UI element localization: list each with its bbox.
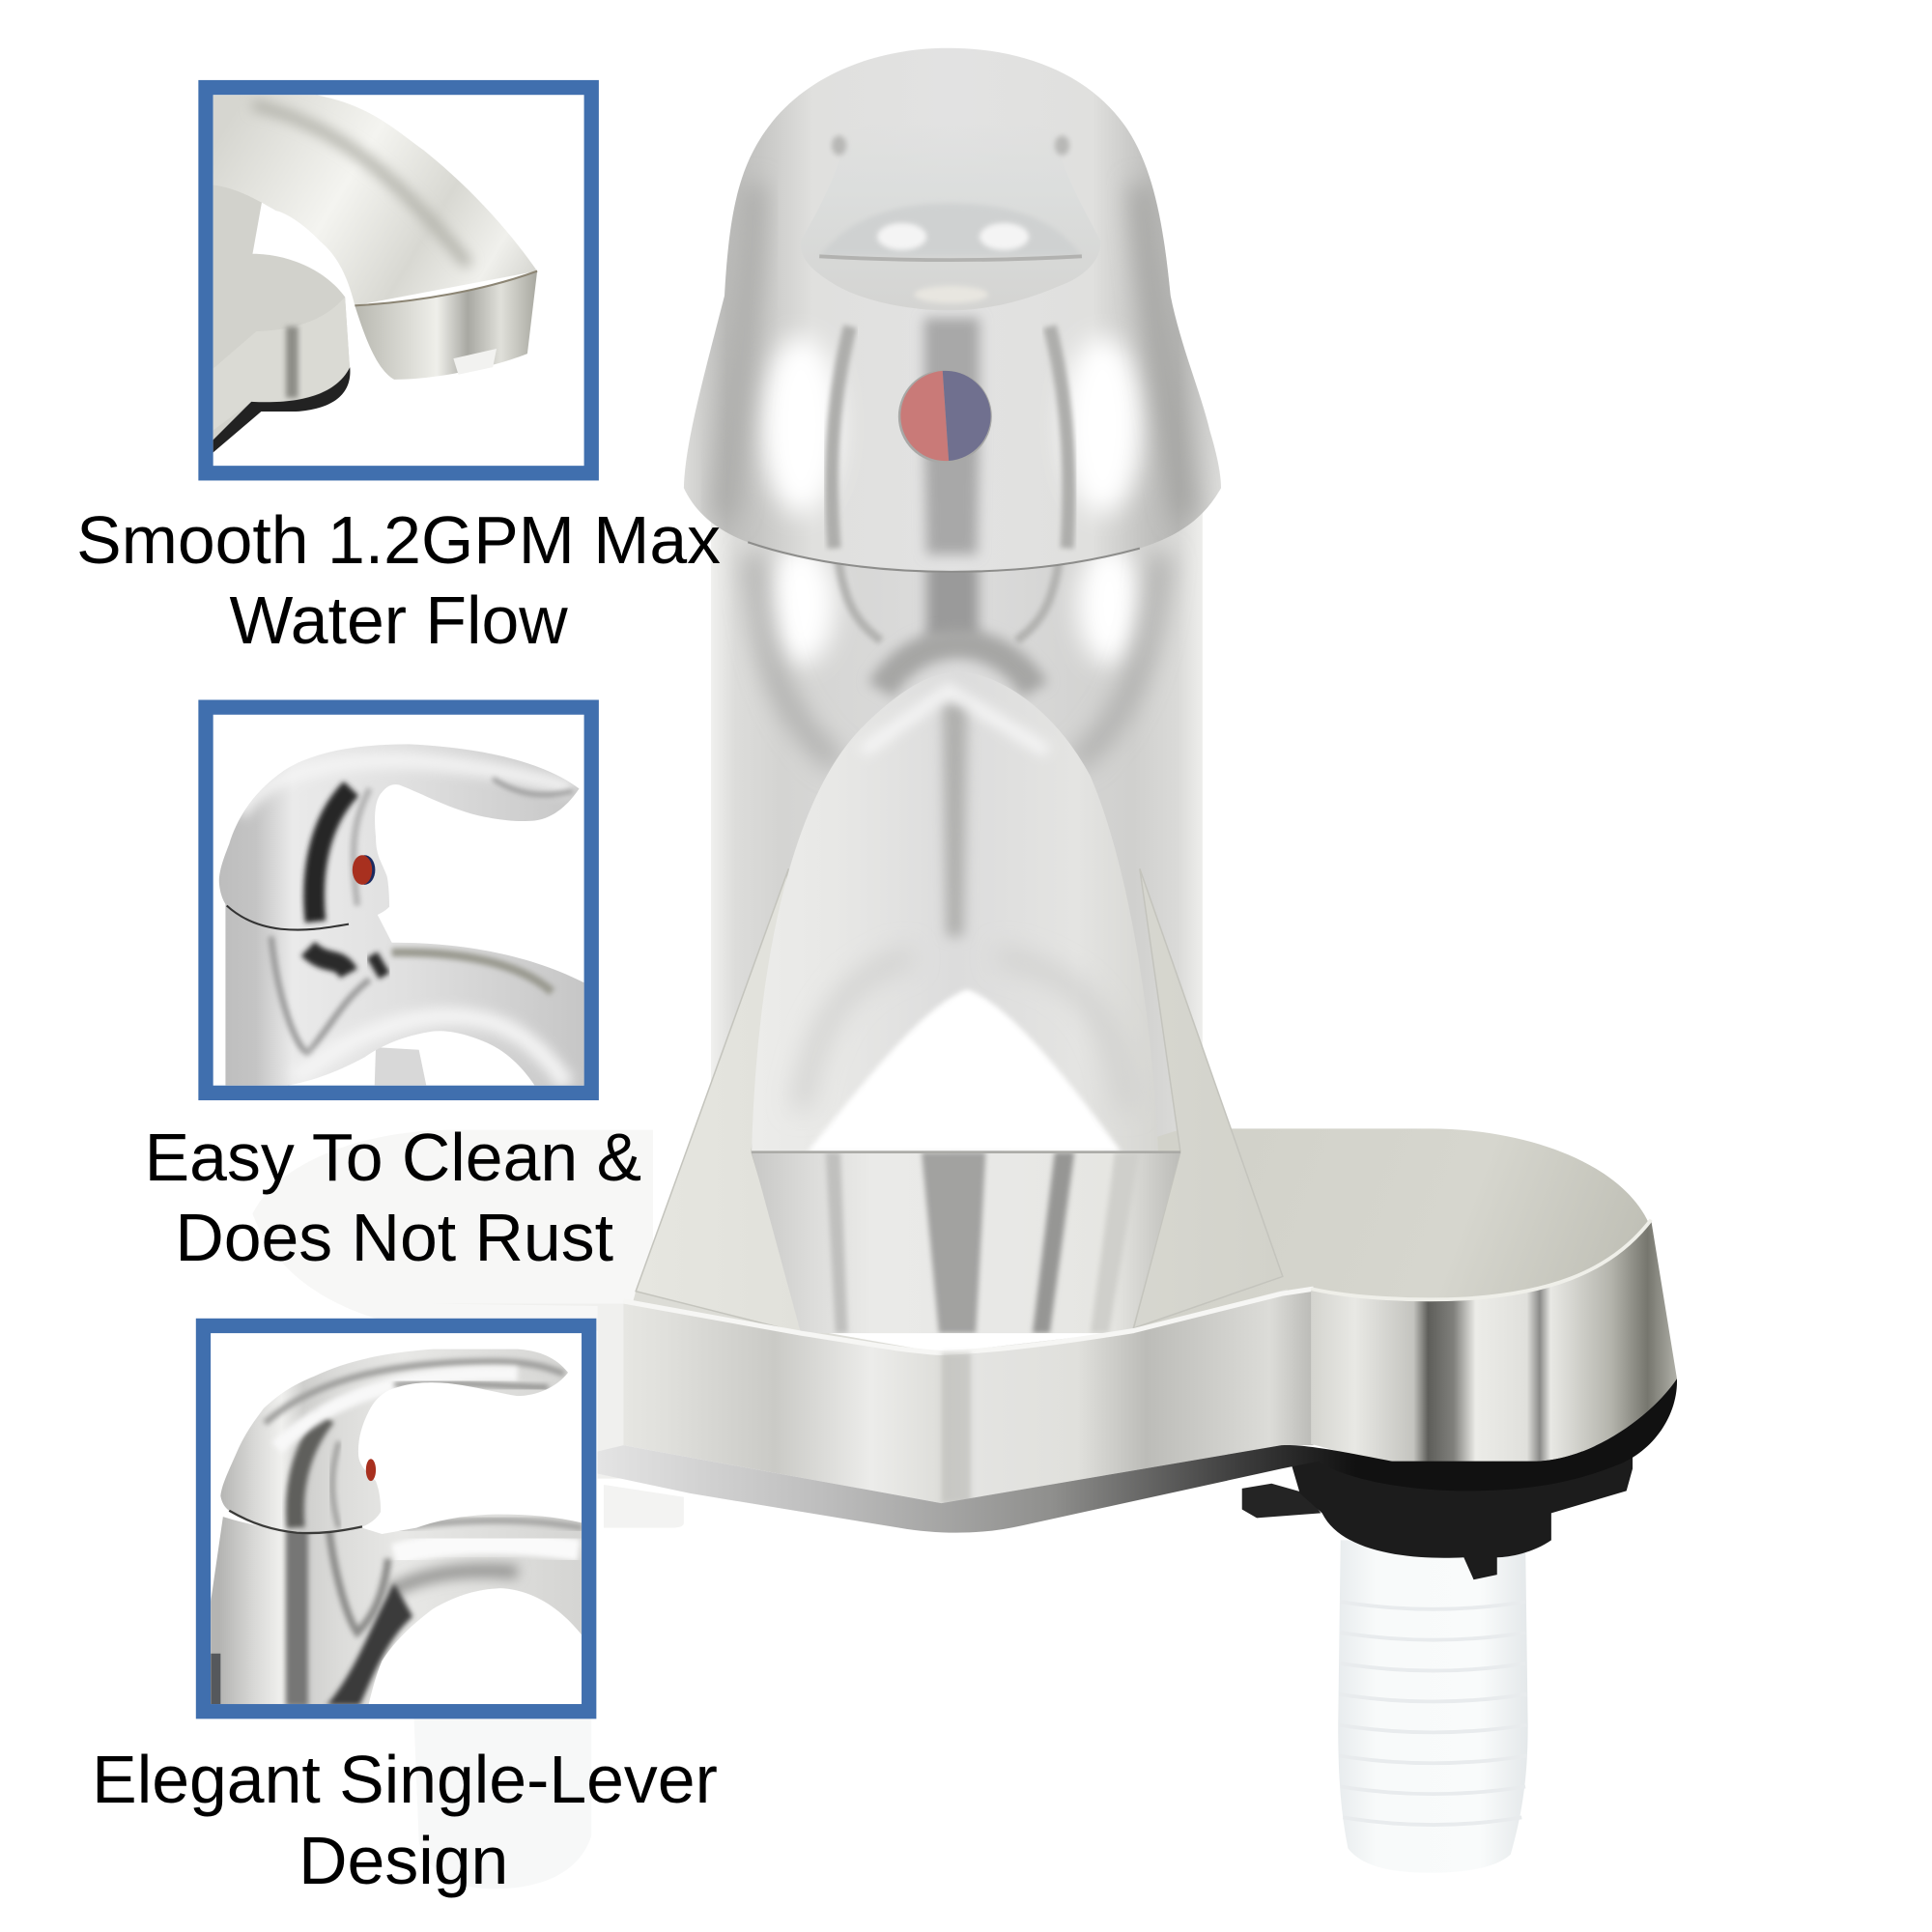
inset 3: handle side view [203,1325,589,1712]
right deck lobe side [1311,1220,1677,1462]
faded ghost of faucet deck and fittings behind the insets [252,1130,684,1889]
main faucet photograph (drawn) [598,48,1677,1873]
handle nose [801,115,1100,310]
caption: single lever design: Elegant Single-Lever [92,1742,718,1817]
deck top surface [1109,1128,1651,1343]
deck front band [623,1289,1314,1503]
spout [752,671,1158,1152]
inset 1: spout close-up [206,88,591,473]
caption: easy to clean [145,1120,641,1275]
handle dome [684,48,1221,572]
nozzle [355,271,537,380]
caption: flow rate [76,502,721,658]
small base lobe [212,185,350,446]
hot and cold indicator [898,370,992,464]
caption: flow rate: Water Flow [230,582,568,658]
deck rim under the plate [629,1289,1288,1368]
caption: flow rate: Smooth 1.2GPM Max [76,502,721,578]
inset 2: handle front view [206,707,591,1093]
threaded supply stem [1338,1540,1528,1873]
gasket under deck [598,1378,1677,1533]
aerator nozzle [752,1152,1180,1333]
caption: easy to clean: Easy To Clean & [145,1120,641,1195]
caption: easy to clean: Does Not Rust [175,1200,613,1275]
body column [711,513,1203,1137]
triangular escutcheon plate [636,868,1283,1334]
caption: single lever design [92,1742,718,1898]
caption: single lever design: Design [298,1823,508,1898]
black mounting nut [1242,1452,1633,1579]
